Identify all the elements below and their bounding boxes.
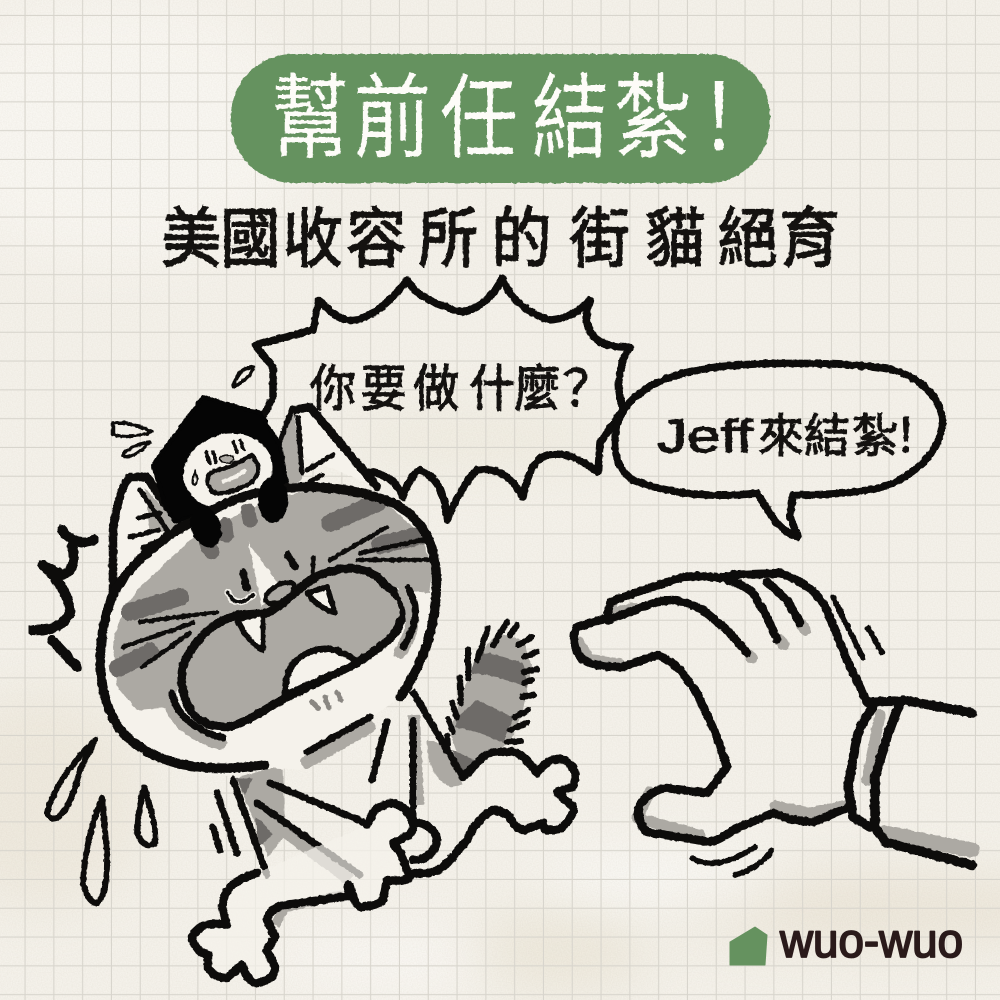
speech bubble: what are you doing [255,278,630,520]
eyes, nose, whiskers [123,527,430,667]
sweat drops [47,367,253,903]
black paws on head [185,502,227,552]
ears [113,407,377,597]
logo: wuo-wuo [730,915,963,968]
body shading [236,765,285,857]
head gray fur [113,490,432,710]
icon: green house [730,927,767,965]
head lines [100,487,437,768]
logo wordmark: wuo-wuo [779,915,963,968]
cat body and paws [192,622,575,983]
mouth [182,568,404,727]
bubble text: 你要做什麼？ [310,362,599,417]
hand shadows [578,603,880,835]
fangs [237,587,335,650]
hand outline [574,573,867,842]
hand motion lines [692,597,882,875]
tail [412,622,537,787]
small character in black hood [153,397,287,522]
subtitle: 美國收容所的街貓絕育 [161,203,839,276]
speech bubble: Jeff [615,363,942,537]
body lines [213,720,413,875]
nose blaze [248,542,277,607]
cheek and chin arcs [169,593,412,762]
fur stripes [118,503,422,668]
title pill [231,54,770,183]
head outline and fill [101,487,437,775]
motion lines left of cat [32,530,95,667]
cat head [100,397,437,780]
bubble text [657,410,929,462]
bubble text: 來結紮！ [758,410,929,462]
finger lines [608,580,800,653]
title text: 幫前任結紮！ [271,68,758,171]
tongue [285,649,357,695]
cuff and sleeve [848,700,972,865]
reaching hand [574,573,972,875]
front paws [192,803,413,983]
bubble text: Jeff [657,410,753,462]
